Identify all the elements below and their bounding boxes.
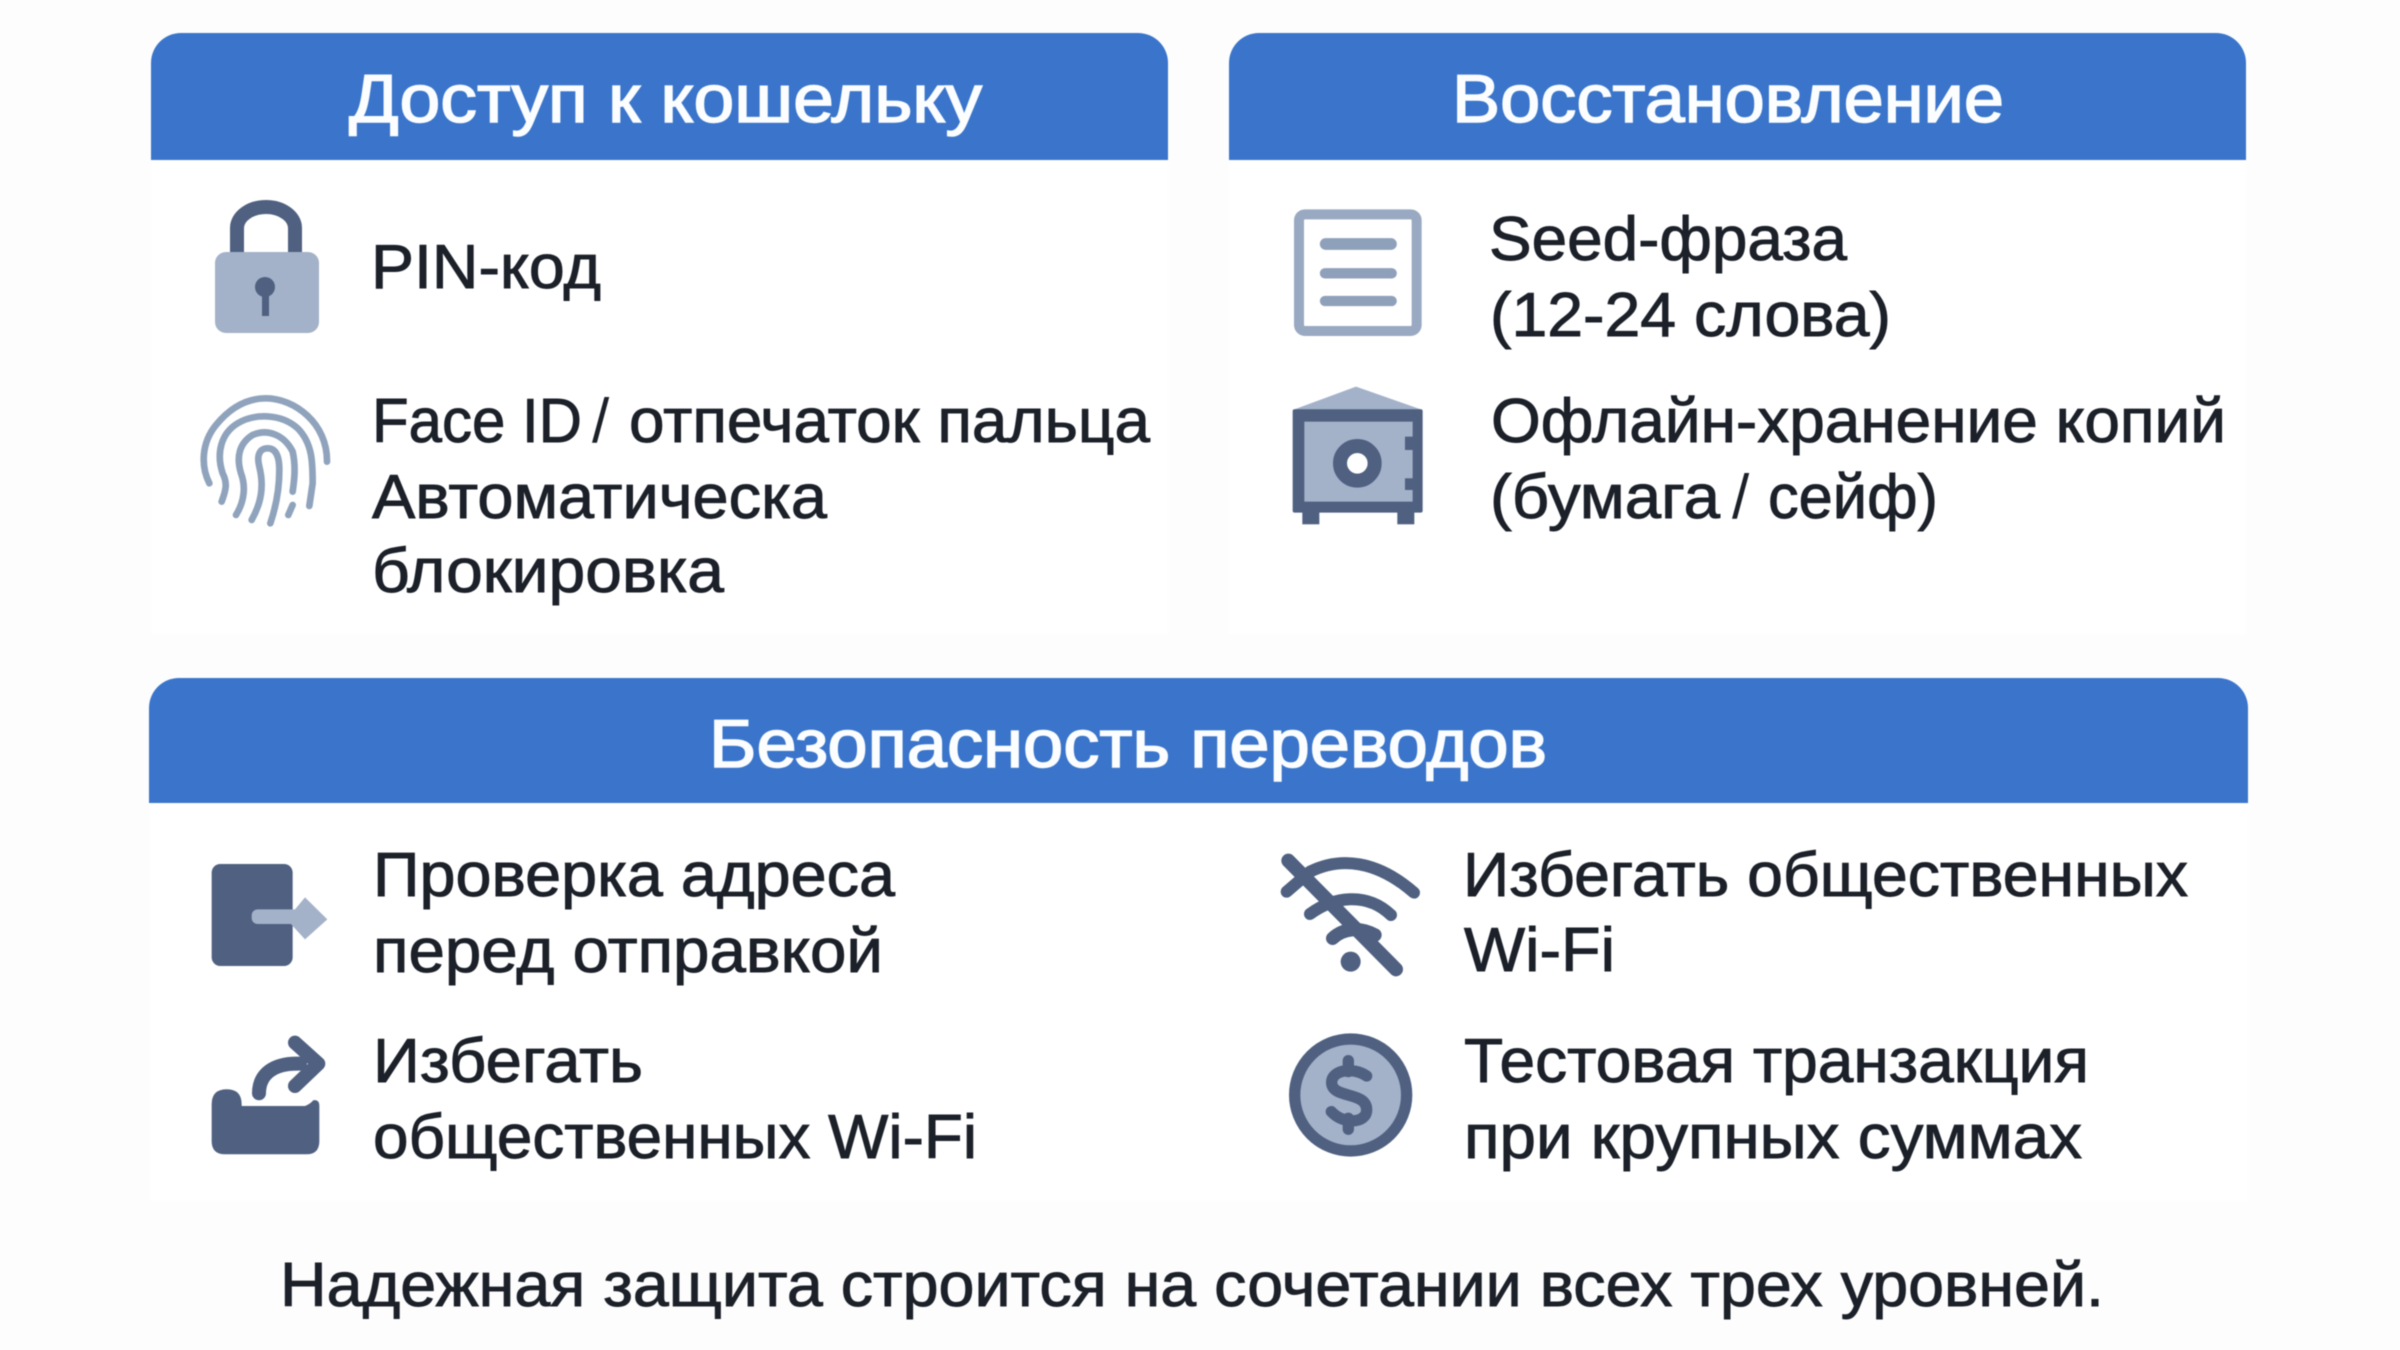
heading: transfer security: Безопасность переводов — [709, 706, 1547, 782]
text: biometric and auto lock: / — [592, 387, 610, 456]
heading: transfer security — [149, 678, 2248, 803]
text: offline storage: (бумага — [1490, 463, 1721, 532]
heading: wallet access: Доступ к кошельку — [349, 61, 982, 137]
text: biometric and auto lock: блокировка — [372, 537, 725, 606]
text: seed phrase: Seed-фраза — [1489, 205, 1848, 274]
text: avoid public wifi left: общественных Wi-Fi — [373, 1103, 977, 1172]
icon: safe — [1293, 387, 1423, 524]
icon: dollar coin — [1295, 1039, 1407, 1151]
icon: share tray with arrow — [212, 1043, 319, 1154]
text: avoid public wifi left: Избегать — [373, 1027, 643, 1096]
panel: wallet access — [151, 33, 1168, 634]
icon: wifi off — [1287, 861, 1414, 972]
text: offline storage: / — [1732, 463, 1750, 532]
text: avoid public wifi right: Избегать общественных — [1463, 841, 2188, 910]
text: test transaction — [1464, 1027, 2089, 1172]
text: seed phrase — [1489, 205, 1891, 350]
text: avoid public wifi right: Wi-Fi — [1464, 916, 1615, 985]
text: biometric and auto lock: Face ID — [372, 387, 582, 456]
text: biometric and auto lock: Автоматическа — [372, 463, 828, 532]
text: offline storage: сейф) — [1768, 463, 1938, 532]
text: test transaction: при крупных суммах — [1464, 1103, 2082, 1172]
panel: transfer security — [149, 678, 2248, 1201]
icon: fingerprint — [204, 398, 327, 523]
panel: recovery — [1229, 33, 2246, 634]
text: PIN code: PIN-код — [371, 233, 601, 302]
icon: padlock — [215, 207, 319, 333]
text: address check: Проверка адреса — [373, 841, 896, 910]
icon: document — [1299, 214, 1417, 331]
text: biometric and auto lock — [372, 387, 1151, 606]
footer caption: Надежная защита строится на сочетании всех трех уровней. — [280, 1251, 2104, 1320]
text: address check — [373, 841, 896, 986]
text: offline storage — [1490, 387, 2226, 532]
icon: send address — [212, 864, 327, 966]
text: avoid public wifi right — [1463, 841, 2188, 985]
text: seed phrase: (12-24 слова) — [1490, 281, 1891, 350]
heading: wallet access — [151, 33, 1168, 160]
heading: recovery: Восстановление — [1452, 61, 2004, 137]
text: biometric and auto lock: отпечаток пальца — [629, 387, 1151, 456]
heading: recovery — [1229, 33, 2246, 160]
text: avoid public wifi left — [373, 1027, 977, 1172]
text: test transaction: Тестовая транзакция — [1464, 1027, 2089, 1096]
text: address check: перед отправкой — [373, 917, 883, 986]
text: offline storage: Офлайн-хранение копий — [1491, 387, 2226, 456]
